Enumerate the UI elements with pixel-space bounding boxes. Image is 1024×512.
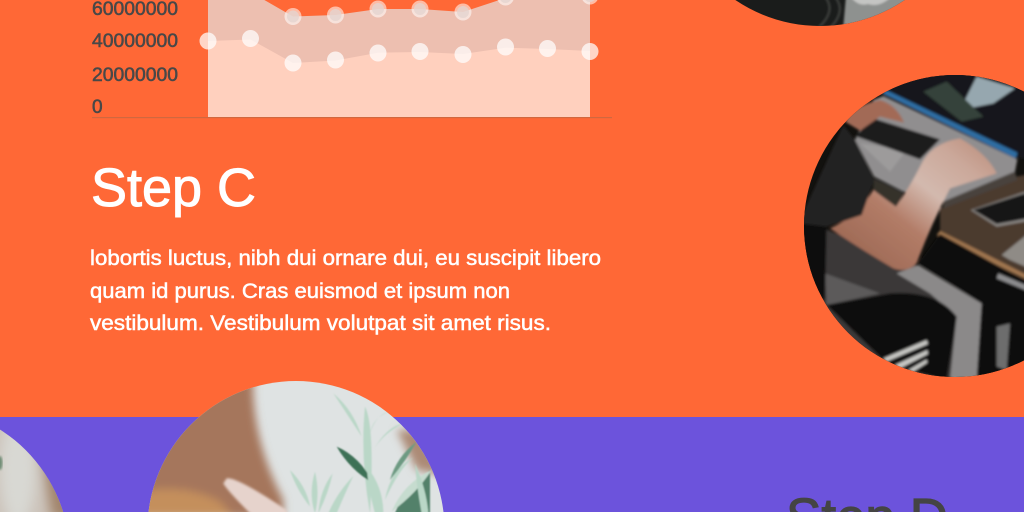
upper series markers	[284, 0, 598, 25]
baseline axis	[92, 117, 612, 118]
shadow under laptop	[873, 178, 903, 208]
y axis labels	[92, 0, 178, 118]
y axis labels: 20000000	[92, 65, 178, 86]
body text	[90, 247, 601, 335]
keyboard	[855, 118, 940, 159]
body text: vestibulum. Vestibulum volutpat sit amet risus.	[90, 312, 551, 335]
upper series marker rings	[287, 0, 596, 22]
photo: left circle	[0, 430, 64, 512]
table	[940, 173, 1024, 280]
upper area series	[208, 0, 590, 117]
shirt	[800, 125, 874, 230]
left hand	[845, 100, 904, 131]
laptop base	[855, 96, 1017, 202]
phone	[971, 192, 1024, 227]
rosemary leaves	[334, 394, 361, 435]
area chart	[92, 0, 612, 118]
heading: Step C: Step C	[91, 158, 256, 218]
blurred brown wall	[152, 386, 290, 512]
panel: purple background	[0, 417, 1024, 512]
blurred brown background right	[397, 430, 450, 477]
laptop screen	[883, 70, 1024, 160]
body text: quam id purus. Cras euismod et ipsum non	[90, 280, 510, 303]
photo: plant circle	[148, 381, 444, 512]
arm	[830, 138, 997, 270]
table underside	[918, 234, 1024, 380]
y axis labels: 40000000	[92, 31, 178, 52]
lower series markers	[200, 30, 598, 72]
y axis labels: 0	[92, 97, 103, 118]
blurred pale finger	[223, 478, 287, 512]
lower area series	[208, 40, 590, 117]
photo: top circle	[735, 0, 905, 26]
body text: lobortis luctus, nibh dui ornare dui, eu suscipit libero	[90, 247, 601, 270]
blurred tan shape	[140, 489, 233, 512]
floor	[822, 228, 956, 377]
trousers	[827, 293, 957, 380]
photo: laptop circle	[800, 70, 1024, 380]
laptop blue edge	[882, 90, 1017, 159]
